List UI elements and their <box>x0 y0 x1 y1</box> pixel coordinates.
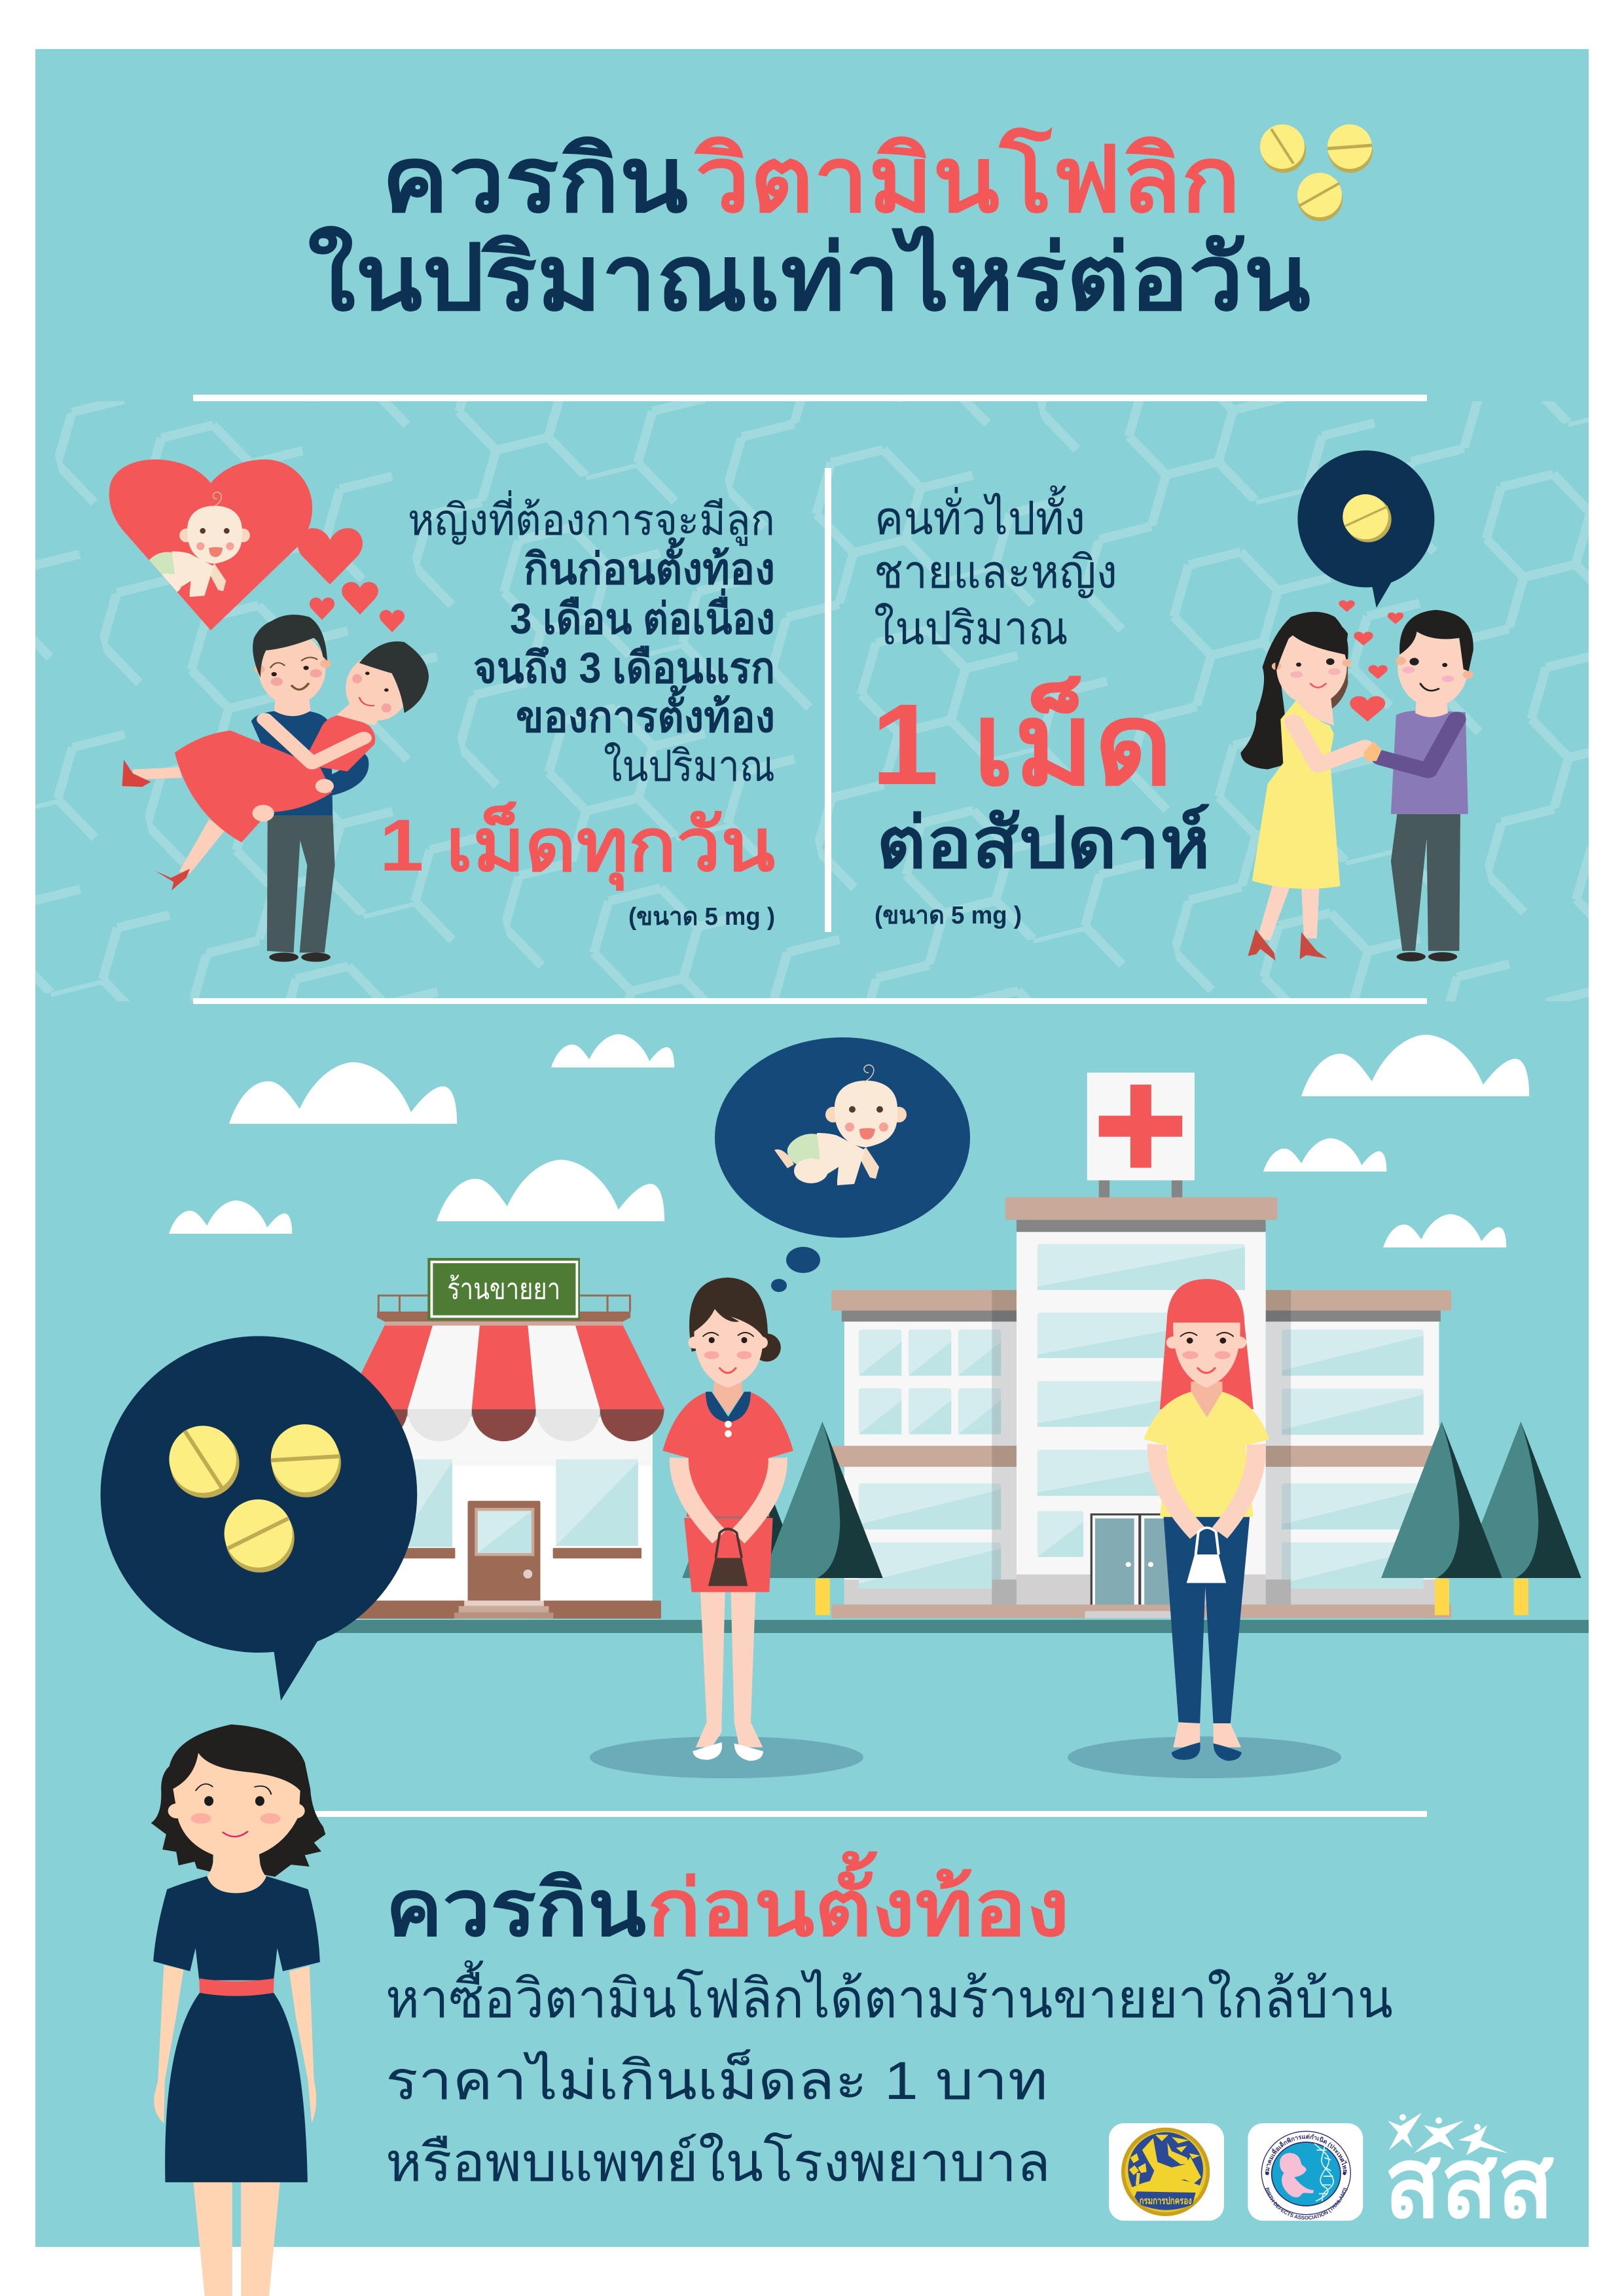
right wing <box>1266 1290 1451 1605</box>
ground strip <box>327 1620 1589 1633</box>
text block: general men and women: คนทั่วไปทั้ง <box>875 485 1085 544</box>
seal: lion and leaves <box>1129 2135 1201 2207</box>
heading: take before pregnancy: ควรกิน <box>386 1865 646 1952</box>
panel: couple 2 illustration with pill bubble <box>1240 450 1473 961</box>
title: ในปริมาณเท่าไหร่ต่อวัน <box>308 225 1310 329</box>
central tower <box>1005 1197 1278 1611</box>
text block: where to buy: ราคาไม่เกินเม็ดละ 1 บาท <box>386 2049 1048 2111</box>
panel: couple 1 illustration with heart and baby <box>109 459 429 962</box>
figure: woman in navy dress <box>151 1725 325 2296</box>
pharmacy sign: ร้านขายยา <box>447 1274 560 1306</box>
shop windows <box>396 1460 641 1558</box>
text block: women planning pregnancy: ในปริมาณ <box>604 742 775 790</box>
trees <box>682 1422 1581 1615</box>
text block: women planning pregnancy: ของการตั้งท้อง <box>516 685 775 741</box>
title <box>308 127 1310 329</box>
figure: woman in yellow shirt with white bag <box>1144 1279 1269 1761</box>
panel: pharmacy shop <box>344 1258 664 1619</box>
text block: general men and women: 1 เม็ด <box>871 675 1173 809</box>
logo: department of provincial administration: กรมการปกครอง <box>1140 2195 1192 2206</box>
icon: small hearts between couple <box>1339 600 1403 721</box>
ground shadows <box>590 1736 1341 1778</box>
text block: general men and women: (ขนาด 5 mg ) <box>875 902 1022 929</box>
figure: woman in red dress with bag <box>662 1278 793 1761</box>
scene: clouds <box>169 1034 1529 1247</box>
hexagon background pattern band <box>35 401 1589 1001</box>
text block: where to buy: หาซื้อวิตามินโฟลิกได้ตามร้านขายยาใกล้บ้าน <box>386 1960 1393 2029</box>
icon: three vitamin pills by title <box>1260 124 1373 221</box>
heading: take before pregnancy <box>386 1851 1070 1952</box>
logo: birth defects association <box>1248 2123 1363 2221</box>
figure: man in purple sweater <box>1363 610 1473 961</box>
text block: general men and women <box>871 485 1210 929</box>
icon: red cross sign <box>1087 1073 1195 1198</box>
text block: women planning pregnancy: กินก่อนตั้งท้อง <box>524 537 775 593</box>
text block: general men and women: ในปริมาณ <box>874 602 1068 654</box>
fetus <box>1280 2153 1314 2197</box>
icon: speech bubble with pill <box>1297 450 1434 608</box>
icon: large speech bubble with three pills <box>101 1336 417 1701</box>
heading: take before pregnancy: ก่อนตั้งท้อง <box>647 1851 1070 1952</box>
icon: thought bubble with baby <box>715 1037 970 1292</box>
logo: ThaiHealth: สสส <box>1384 2128 1554 2238</box>
icon: three jumping figures <box>1388 2113 1508 2155</box>
text block: where to buy: หรือพบแพทย์ในโรงพยาบาล <box>386 2133 1051 2193</box>
figure: woman in yellow dress <box>1240 612 1365 961</box>
shop door <box>468 1501 541 1602</box>
panel: hospital building <box>682 1073 1581 1618</box>
text block: women planning pregnancy: จนถึง 3 เดือนแรก <box>473 643 775 692</box>
text block: women planning pregnancy: (ขนาด 5 mg ) <box>628 903 775 931</box>
text block: women planning pregnancy: 3 เดือน ต่อเนื่อง <box>510 588 775 643</box>
striped awning <box>344 1325 664 1441</box>
text block: general men and women: ต่อสัปดาห์ <box>876 803 1210 882</box>
DNA helix <box>1314 2144 1333 2201</box>
icon: small hearts <box>298 528 405 632</box>
logo: department of provincial administration <box>1109 2123 1224 2221</box>
seal: name banner <box>1134 2191 1196 2210</box>
icon: baby in heart <box>149 492 250 597</box>
pharmacy sign <box>427 1258 580 1320</box>
text block: where to buy <box>386 1960 1393 2193</box>
left wing <box>831 1290 1017 1605</box>
association name, Thai: สมาคมเพื่อเด็กพิการแต่กำเนิด (ประเทศไทย) <box>1265 2134 1347 2175</box>
figure: man carrying woman <box>122 615 429 962</box>
text block: general men and women: ชายและหญิง <box>874 547 1117 598</box>
icon: large heart <box>109 459 312 630</box>
association name, English: BIRTH DEFECTS ASSOCIATION (THAILAND) <box>1265 2187 1348 2220</box>
text block: women planning pregnancy: หญิงที่ต้องการจะมีลูก <box>408 490 775 547</box>
text block: women planning pregnancy: 1 เม็ดทุกวัน <box>380 801 775 891</box>
hospital doors <box>1091 1513 1192 1611</box>
title: วิตามินโฟลิก <box>693 127 1240 231</box>
text block: women planning pregnancy <box>380 490 775 931</box>
title: ควรกิน <box>382 128 688 231</box>
